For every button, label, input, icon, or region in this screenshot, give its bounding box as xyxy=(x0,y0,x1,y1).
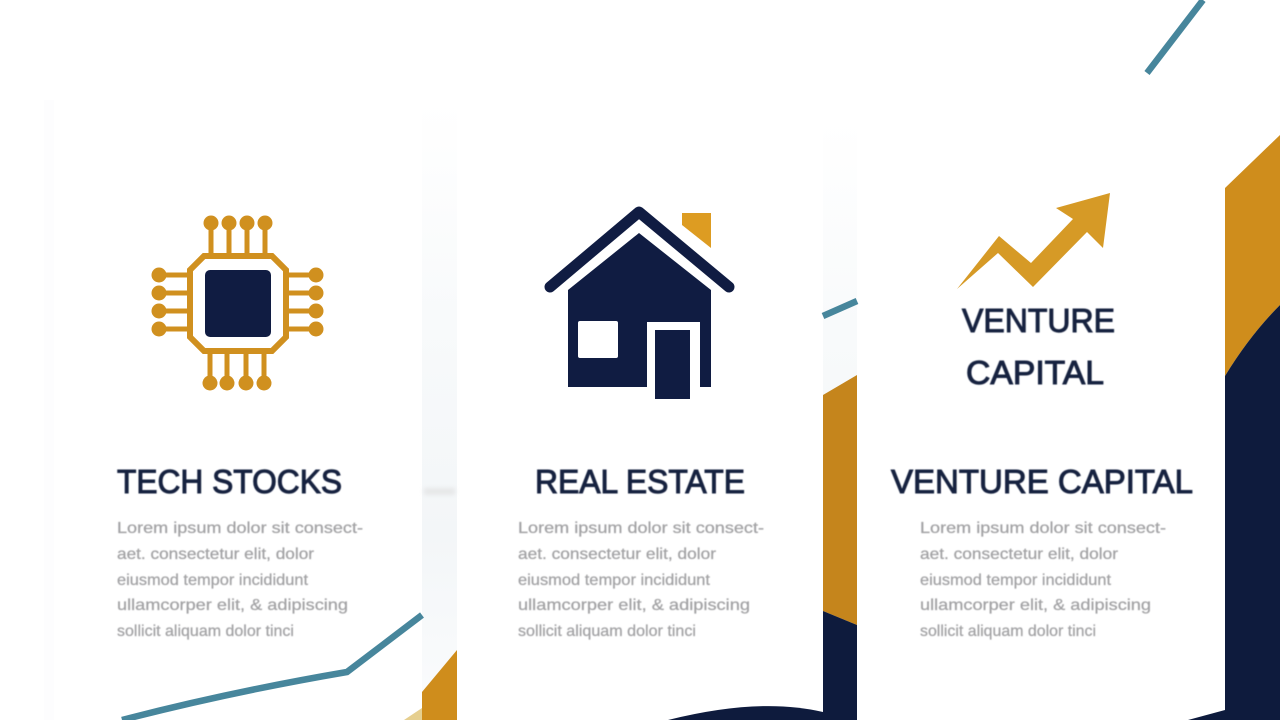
text block: tech stocks description: aet. consectetur elit, dolor xyxy=(117,546,315,563)
heading: real estate: REAL ESTATE xyxy=(535,463,745,500)
text block: tech stocks description: sollicit aliquam dolor tinci xyxy=(117,623,294,640)
decorative teal trend line: middle gap xyxy=(823,301,857,316)
panel: tech stocks xyxy=(117,216,363,640)
text block: venture capital description: sollicit aliquam dolor tinci xyxy=(920,623,1096,640)
text block: real estate description: Lorem ipsum dolor sit consect- xyxy=(518,520,764,537)
decorative navy shape: second gap xyxy=(823,611,857,720)
decorative gold shape: right edge xyxy=(1225,135,1280,376)
text block: real estate description: eiusmod tempor incididunt xyxy=(518,572,711,589)
text block: tech stocks description: eiusmod tempor incididunt xyxy=(117,572,309,589)
text block: venture capital description: aet. consectetur elit, dolor xyxy=(920,546,1119,563)
text block: venture capital description: Lorem ipsum dolor sit consect- xyxy=(920,520,1166,537)
text block: venture capital description: eiusmod tempor incididunt xyxy=(920,572,1112,589)
text block: real estate description: aet. consectetur elit, dolor xyxy=(518,546,717,563)
text block: tech stocks description: ullamcorper elit, & adipiscing xyxy=(117,597,348,614)
text block: venture capital description xyxy=(920,520,1166,640)
icon label: venture capital: VENTURE xyxy=(962,302,1115,339)
decorative navy shape: right edge xyxy=(1225,305,1280,720)
text block: real estate description: ullamcorper elit, & adipiscing xyxy=(518,597,750,614)
text block: real estate description xyxy=(518,520,764,640)
panel: real estate xyxy=(518,212,764,640)
text block: venture capital description: ullamcorper elit, & adipiscing xyxy=(920,597,1151,614)
icon: house xyxy=(550,212,729,399)
decorative teal trend line: bottom left xyxy=(122,615,422,720)
icon label: venture capital: CAPITAL xyxy=(966,354,1104,391)
icon: microchip xyxy=(152,216,324,390)
decorative teal trend line: top right xyxy=(1147,0,1203,73)
heading: venture capital: VENTURE CAPITAL xyxy=(891,463,1193,500)
decorative gold shape: first gap xyxy=(422,650,457,720)
decorative navy wave: bottom of card 2 xyxy=(668,706,823,720)
gap shading between cards xyxy=(44,100,857,720)
text block: tech stocks description: Lorem ipsum dolor sit consect- xyxy=(117,520,363,537)
icon: rising arrow xyxy=(957,193,1110,289)
panel: venture capital xyxy=(891,193,1193,640)
decorative navy wave: bottom of card 3 xyxy=(1188,710,1225,720)
heading: tech stocks: TECH STOCKS xyxy=(117,463,342,500)
decorative gold shape: second gap xyxy=(823,375,857,625)
decorative tan shape: bottom xyxy=(404,708,422,720)
text block: tech stocks description xyxy=(117,520,363,640)
icon label: venture capital xyxy=(962,302,1115,391)
text block: real estate description: sollicit aliquam dolor tinci xyxy=(518,623,696,640)
